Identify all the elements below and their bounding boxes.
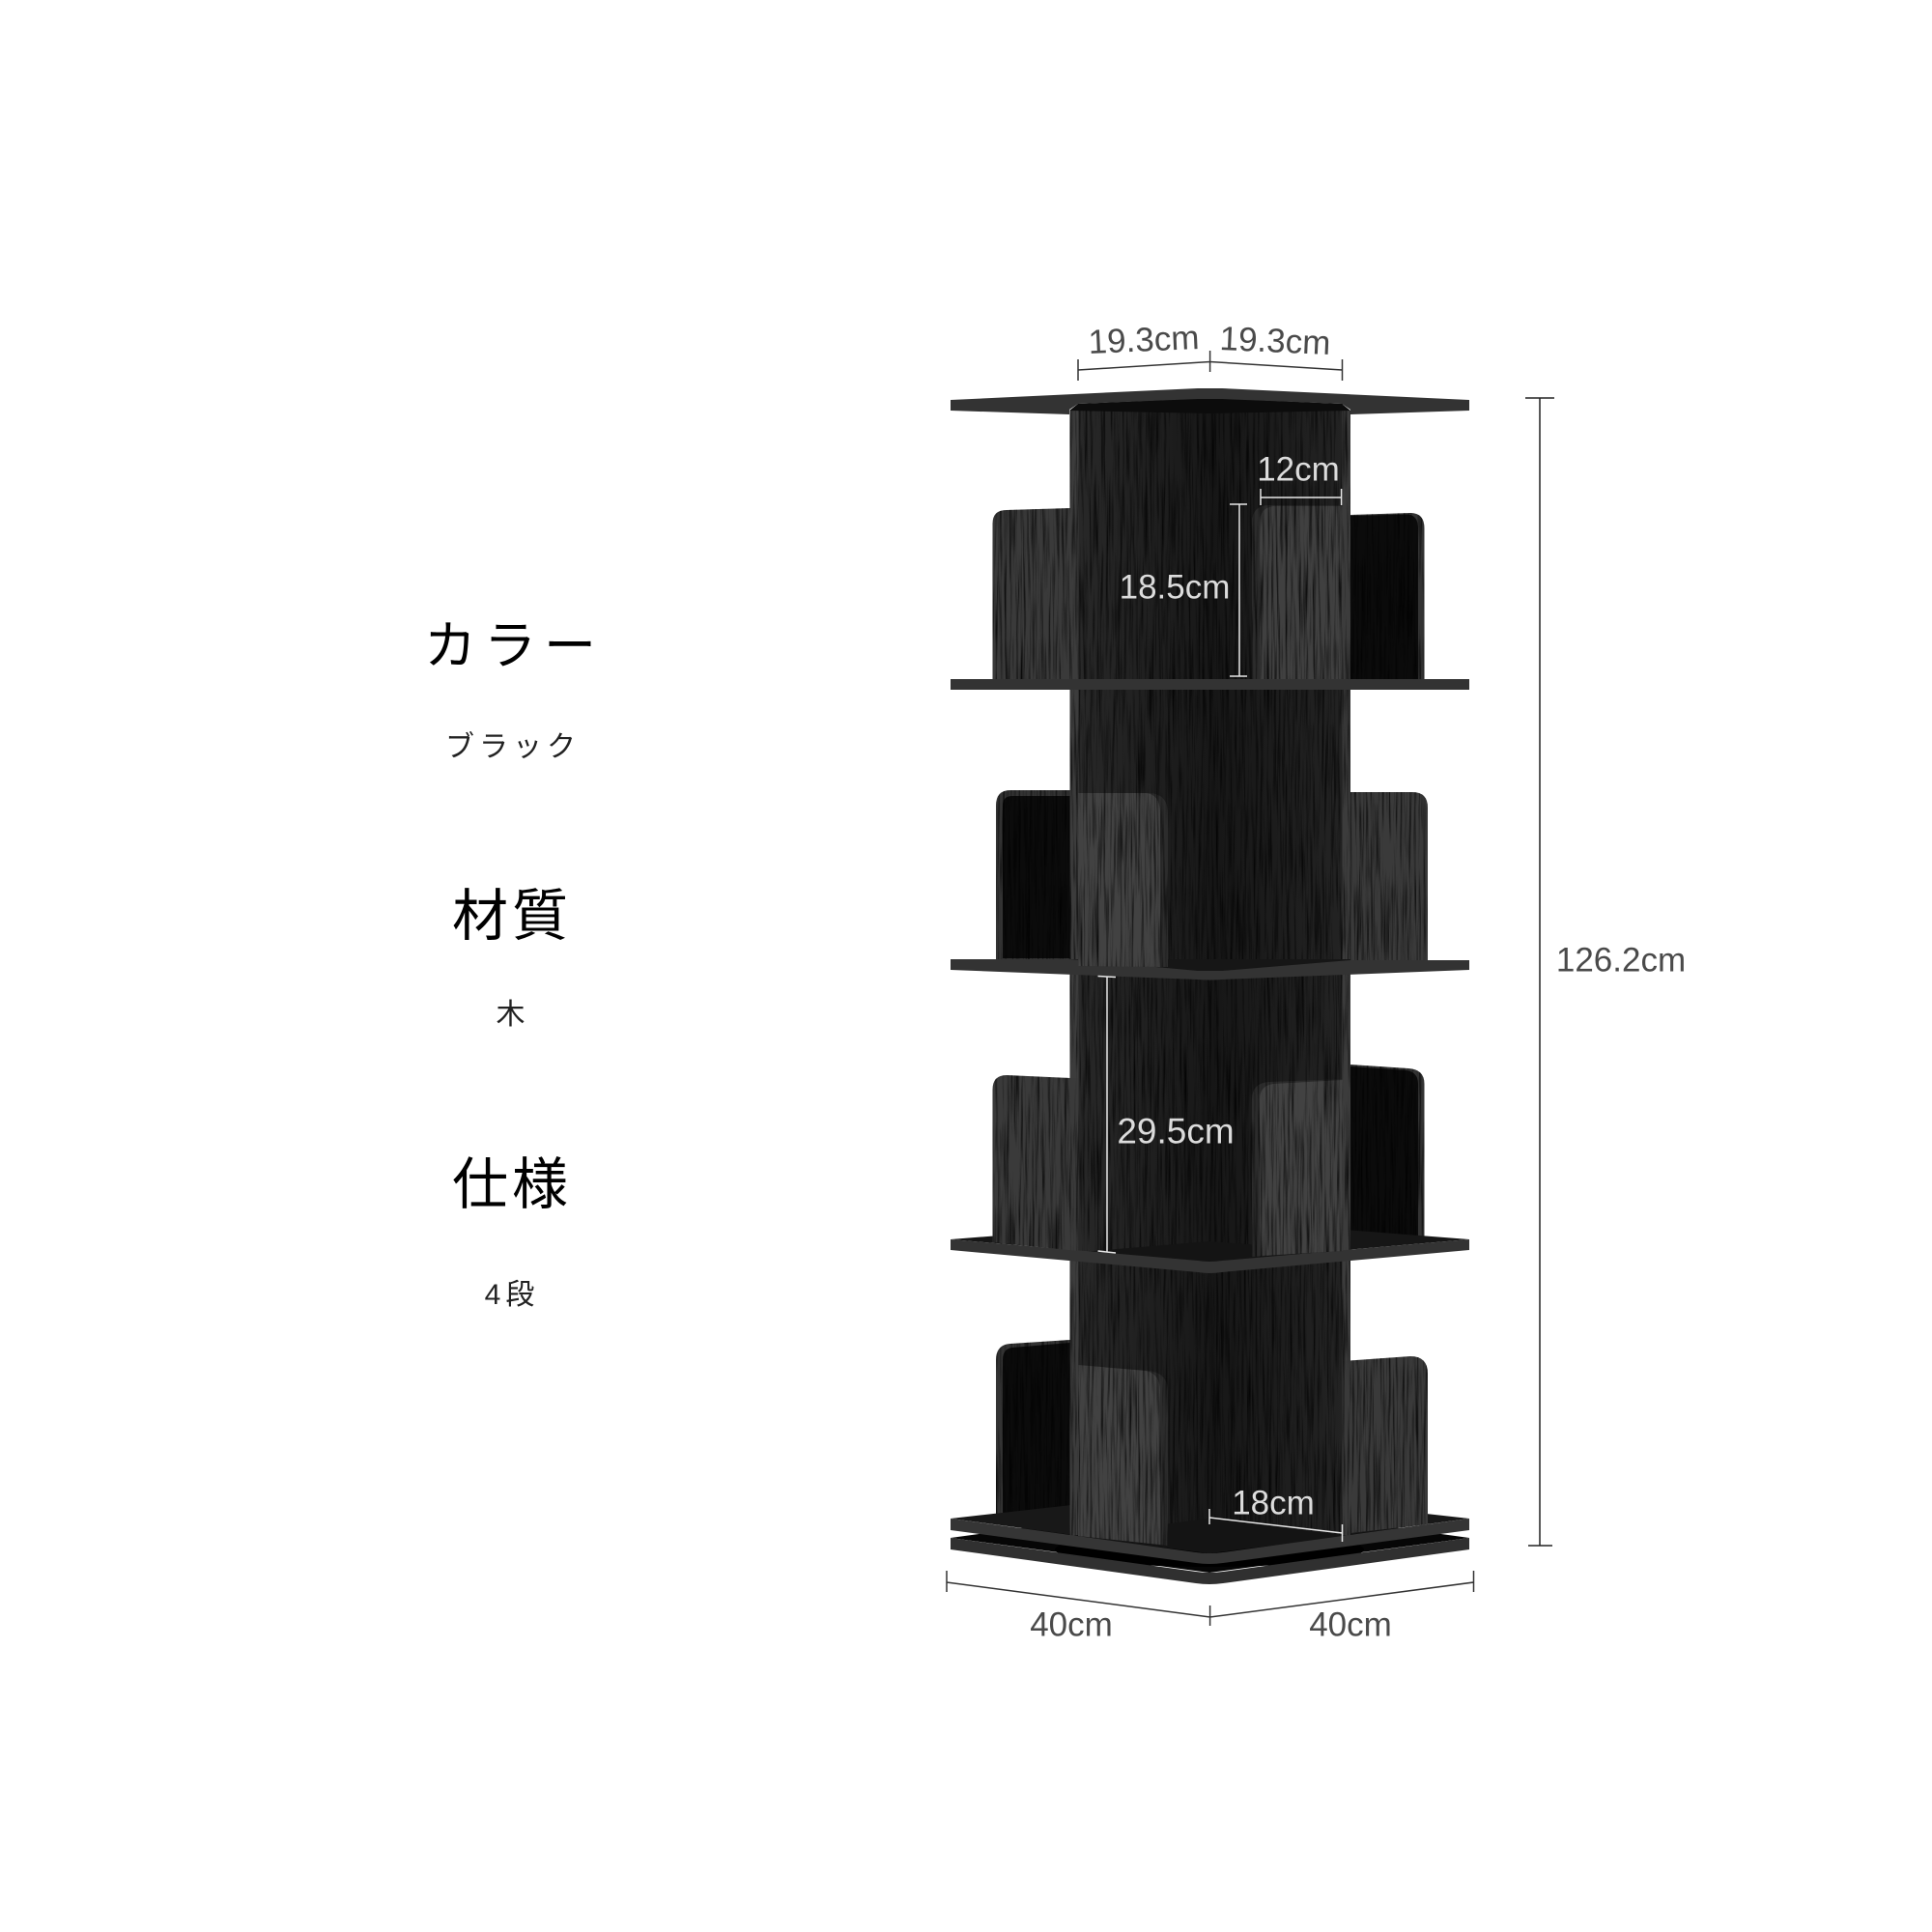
third shelf [951,959,1469,980]
fifth shelf front edge [951,1519,1469,1564]
tier 3 left front panel [993,1075,1078,1251]
shelf outer surfaces [951,1219,1469,1553]
central column [1070,404,1350,1539]
tier shelves [951,388,1469,1564]
label: overall height: 126.2cm [1556,941,1686,980]
tier 2 left divider [996,790,1070,961]
tier 2 right divider [1342,792,1428,966]
heading: color: カラー [424,617,604,675]
tier 4 left divider [996,1340,1070,1517]
dimension: overall height [1525,398,1554,1546]
tier 3 shelf surface [951,1219,1469,1262]
base plate [951,1502,1469,1584]
dimension: partition width 12cm [1261,489,1342,505]
tier 1 left divider [993,508,1070,681]
tier 1 right divider [1350,513,1424,681]
column left face [1078,404,1210,1539]
dimension: tier height 29.5cm [1097,976,1116,1253]
fifth shelf inner surface [1070,1519,1350,1553]
label: top left width: 19.3cm [1088,319,1200,361]
label: partition width: 12cm [1257,450,1340,489]
fourth shelf front edge [951,1239,1469,1273]
value: wood: 木 [497,999,529,1031]
tier 4 shelf surface [951,1490,1469,1553]
dimension: top widths [1078,351,1343,381]
label: tier height: 29.5cm [1117,1111,1235,1151]
top shelf [951,388,1469,414]
label: partition height: 18.5cm [1120,568,1230,607]
heading: specification: 仕様 [452,1153,572,1216]
tier 3 right divider [1350,1065,1424,1240]
second shelf [951,679,1469,690]
illustration: black four-tier rotating bookshelf [951,388,1469,1584]
label: bottom right width: 40cm [1309,1605,1392,1644]
value: four tiers: 4段 [485,1279,539,1311]
label: top right width: 19.3cm [1219,320,1331,362]
label: shelf depth: 18cm [1232,1484,1315,1522]
value: black: ブラック [445,731,581,763]
fourth shelf inner surface [1070,1241,1350,1262]
column right edge [1343,411,1350,1536]
tier 3 right front panel [1252,1079,1343,1257]
back panels [993,508,1428,1517]
column right face [1209,404,1343,1539]
tier 1 right front panel [1252,505,1343,679]
heading: material: 材質 [452,885,572,948]
tier 4 left front panel [1078,1365,1168,1546]
tier 2 left front panel [1078,793,1168,967]
tier 4 right panel [1343,1356,1428,1534]
text block: product specifications [424,617,604,1311]
dimension: shelf depth 18cm [1209,1509,1343,1542]
dimension: partition height 18.5cm [1230,504,1247,676]
column left edge [1070,411,1078,1536]
front panels [993,505,1428,1546]
label: bottom left width: 40cm [1030,1605,1113,1644]
dimension: bottom depth [947,1571,1474,1626]
